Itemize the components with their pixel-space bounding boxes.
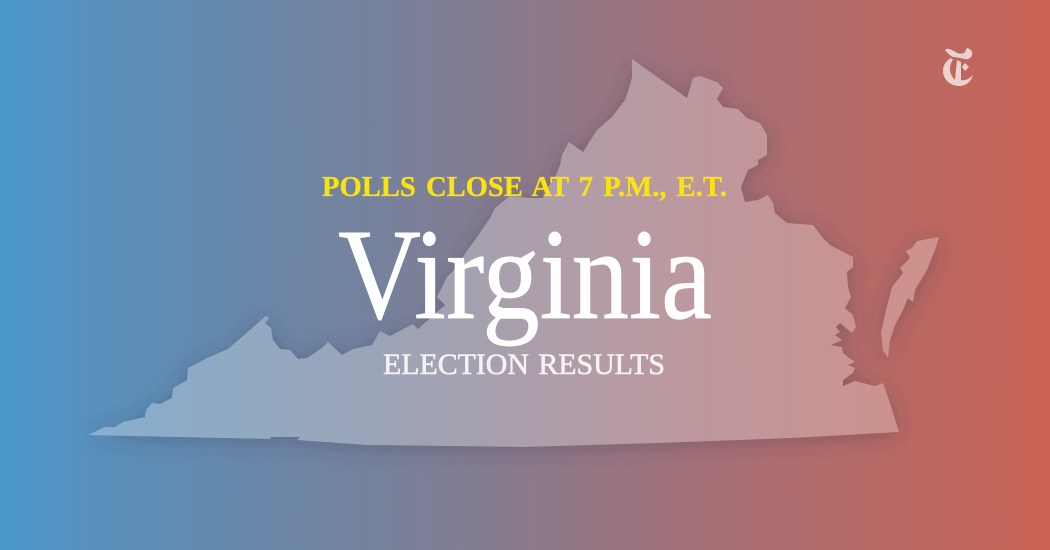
- heading: poll closing time: POLLS CLOSE AT 7 P.M., E.T.: [322, 172, 727, 203]
- icon: newspaper T logo: [943, 48, 973, 86]
- map shadow: [88, 59, 939, 447]
- title: Virginia: Virginia: [338, 203, 712, 347]
- map: Virginia silhouette: [88, 59, 939, 447]
- subtitle: election results: ELECTION RESULTS: [383, 349, 665, 381]
